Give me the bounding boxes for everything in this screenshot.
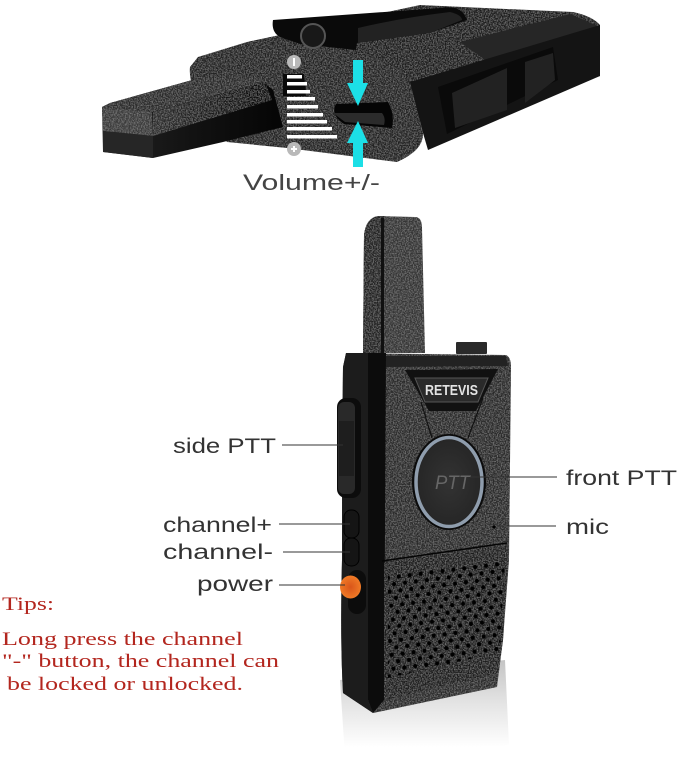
reflection under front radio xyxy=(340,660,509,757)
top button xyxy=(456,342,487,354)
minus badge xyxy=(287,55,301,69)
label: Volume: Volume+/- xyxy=(243,170,380,195)
side connector cover xyxy=(438,47,558,134)
radio top surface xyxy=(247,5,600,122)
front PTT button: PTT xyxy=(435,473,471,494)
label: channel plus: channel+ xyxy=(163,514,272,537)
tips text: be locked or unlocked. xyxy=(7,674,243,695)
front radio xyxy=(337,216,511,713)
volume wheel xyxy=(334,102,393,128)
logo panel xyxy=(405,369,498,411)
belt clip xyxy=(273,7,467,50)
left side panel xyxy=(341,353,373,713)
mic hole xyxy=(492,525,496,529)
label: power: power xyxy=(197,573,273,596)
side PTT button xyxy=(337,398,361,498)
label: channel minus: channel- xyxy=(163,541,273,564)
label: mic xyxy=(497,516,609,539)
seam xyxy=(382,543,507,561)
tips text: "-" button, the channel can xyxy=(2,651,280,672)
front PTT button xyxy=(412,434,486,530)
antenna stub xyxy=(102,77,283,158)
speaker grille xyxy=(388,560,505,678)
body xyxy=(341,353,511,713)
cyan arrow up xyxy=(347,121,368,167)
cyan arrow down xyxy=(347,60,368,106)
logo text: RETEVIS xyxy=(425,382,478,399)
speaker panel shade xyxy=(384,545,508,700)
power button xyxy=(340,576,361,598)
radio end face xyxy=(190,42,423,162)
side band xyxy=(410,25,600,150)
antenna xyxy=(363,216,425,353)
tips text xyxy=(2,594,280,695)
top cap band xyxy=(386,356,508,367)
volume scale wedge xyxy=(283,74,337,138)
plus badge xyxy=(287,142,301,156)
channel minus button xyxy=(344,538,359,566)
tips text: Long press the channel xyxy=(2,629,243,650)
dark left corner stripe xyxy=(368,353,386,713)
top radio: bottom end view xyxy=(102,5,600,167)
label: mic: mic xyxy=(566,516,609,539)
channel plus button xyxy=(344,510,359,538)
tips text: Tips: xyxy=(2,594,54,615)
label: side PTT: side PTT xyxy=(173,435,276,458)
label: front PTT: front PTT xyxy=(566,467,677,490)
power button housing xyxy=(348,570,366,614)
